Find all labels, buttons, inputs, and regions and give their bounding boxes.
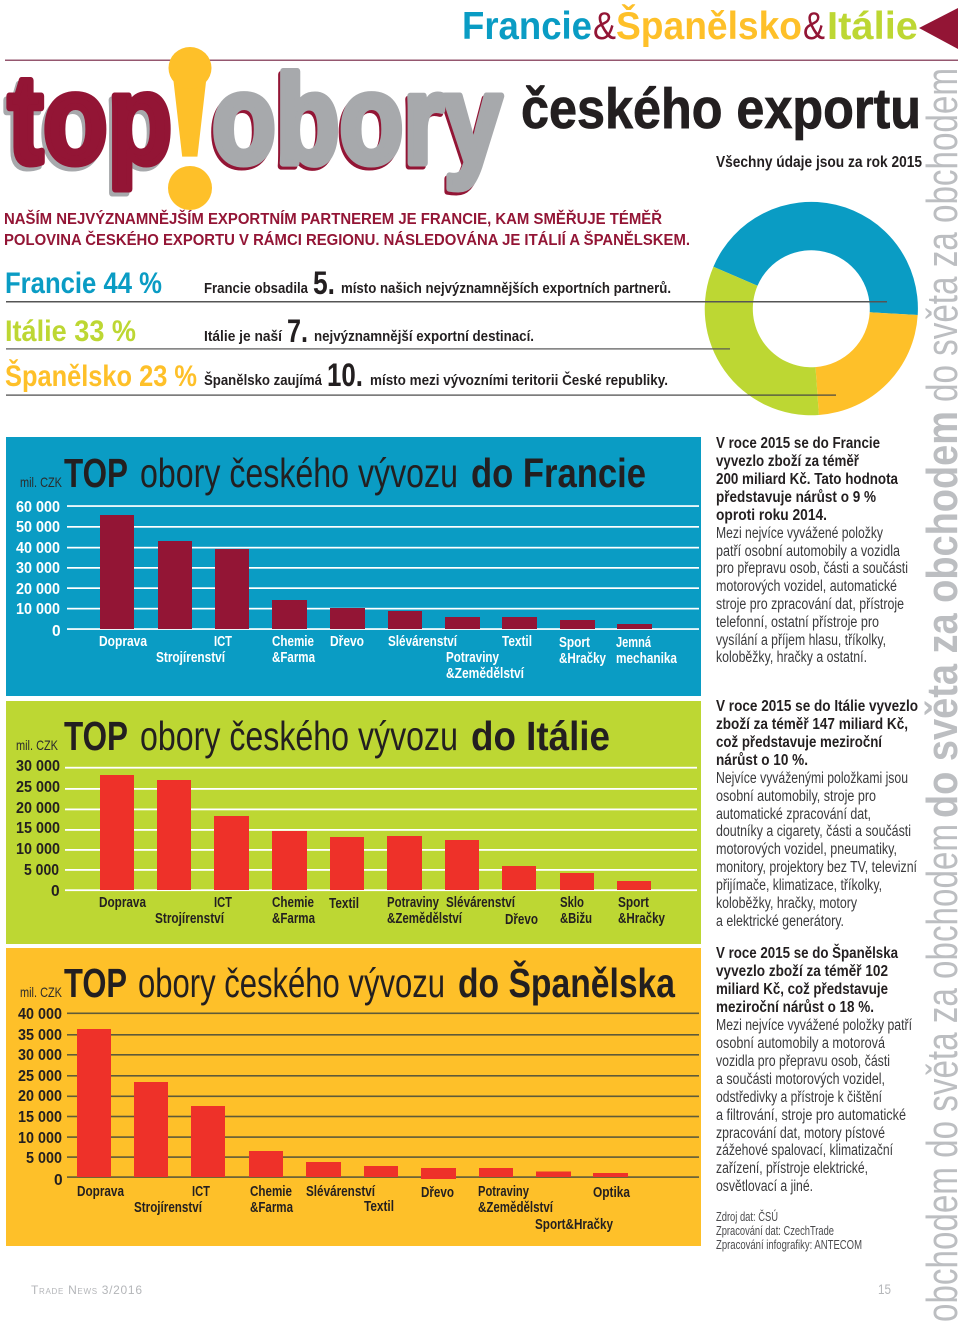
chart title: Francie: do Francie bbox=[471, 450, 646, 496]
y axis labels: 15 000 bbox=[16, 820, 60, 837]
text block: Francie: V roce 2015 se do Francie bbox=[716, 435, 880, 452]
logo word: obory: obory bbox=[210, 52, 500, 193]
sources: Zpracování dat: CzechTrade bbox=[716, 1224, 834, 1238]
text block: Itálie: motorových vozidel, pneumatiky, bbox=[716, 841, 897, 858]
category labels: Španělsko: Sport&Hračky bbox=[535, 1217, 613, 1233]
text block: Francie: stroje pro zpracování dat, přístroje bbox=[716, 596, 904, 613]
category labels: Španělsko: Dřevo bbox=[421, 1185, 454, 1201]
row: Španělsko share: Španělsko 23 % bbox=[5, 359, 197, 393]
intro text: NAŠÍM NEJVÝZNAMNĚJŠÍM EXPORTNÍM PARTNEREM JE FRANCIE, KAM SMĚŘUJE TÉMĚŘ bbox=[4, 209, 662, 228]
chart title: Francie: TOP bbox=[64, 450, 128, 496]
category labels: Francie: ICT bbox=[214, 634, 232, 650]
category labels: Francie: Slévárenství bbox=[388, 634, 458, 650]
row: Španělsko share: Španělsko zaujímá bbox=[204, 371, 323, 389]
y axis labels bbox=[16, 758, 60, 900]
row: Francie share: místo našich nejvýznamnějších exportních partnerů. bbox=[341, 281, 671, 297]
category labels: Itálie: Potraviny bbox=[387, 895, 439, 911]
category labels: Francie: &Farma bbox=[272, 650, 316, 666]
category labels: Itálie: Textil bbox=[329, 896, 359, 912]
row: Francie share: Francie obsadila bbox=[204, 281, 309, 297]
icon: header triangle bbox=[919, 8, 958, 49]
chart title: Španělsko: obory českého vývozu bbox=[138, 960, 445, 1006]
y axis labels: 40 000 bbox=[18, 1006, 62, 1023]
text block: Španělsko: miliard Kč, což představuje bbox=[716, 981, 888, 998]
note: year: Všechny údaje jsou za rok 2015 bbox=[716, 154, 922, 171]
chart title: Španělsko: do Španělska bbox=[458, 960, 676, 1006]
category labels: Itálie: &Farma bbox=[272, 911, 316, 927]
text block: Španělsko bbox=[716, 944, 913, 1195]
vertical side text bbox=[918, 68, 960, 1322]
text block: Itálie: přijímače, klimatizace, tříkolky, bbox=[716, 877, 882, 894]
chart title: Španělsko bbox=[64, 960, 676, 1006]
category labels: Francie: &Hračky bbox=[559, 651, 606, 667]
text block: Itálie: automatické zpracování dat, bbox=[716, 806, 871, 823]
chart title: Itálie: TOP bbox=[64, 713, 128, 759]
y axis labels: 30 000 bbox=[16, 758, 60, 775]
unit label: mil. CZK bbox=[16, 737, 59, 753]
y axis labels: 0 bbox=[51, 883, 60, 900]
panel: Itálie bbox=[6, 701, 701, 944]
category labels: Španělsko: Slévárenství bbox=[306, 1184, 376, 1200]
category labels: Francie: &Zemědělství bbox=[446, 666, 525, 682]
category labels: Francie: Potraviny bbox=[446, 650, 499, 666]
y axis labels: 25 000 bbox=[18, 1068, 62, 1085]
category labels: Španělsko: Optika bbox=[593, 1185, 631, 1201]
row: Francie share: Francie 44 % bbox=[5, 267, 162, 300]
logo word: top: top bbox=[8, 49, 172, 190]
y axis labels: 10 000 bbox=[16, 841, 60, 858]
chart title: Francie: obory českého vývozu bbox=[140, 450, 458, 496]
text block: Španělsko: a filtrování, stroje pro automatické bbox=[716, 1107, 906, 1124]
row: Itálie share: nejvýznamnější exportní destinací. bbox=[314, 329, 534, 345]
row: Španělsko share bbox=[5, 357, 836, 396]
text block: Itálie: což představuje meziroční bbox=[716, 734, 883, 751]
text block: Španělsko: osobní automobily a motorová bbox=[716, 1035, 885, 1052]
bar chart: Francie bbox=[100, 515, 652, 629]
sources: Zpracování infografiky: ANTECOM bbox=[716, 1238, 862, 1252]
category labels: Itálie: Chemie bbox=[272, 895, 314, 911]
text block: Španělsko: zařízení, přístroje elektrické, bbox=[716, 1160, 868, 1177]
text block: Španělsko: vyvezlo zboží za téměř 102 bbox=[716, 963, 888, 980]
row: Itálie share: 7. bbox=[287, 313, 308, 349]
y axis labels: 20 000 bbox=[18, 1088, 62, 1105]
text block: Španělsko: vozidla pro přepravu osob, části bbox=[716, 1053, 890, 1070]
text block: Francie: patří osobní automobily a vozidla bbox=[716, 543, 900, 560]
category labels: Itálie: &Bižu bbox=[560, 911, 592, 927]
header: countries: Španělsko bbox=[616, 3, 802, 48]
category labels: Itálie: Sklo bbox=[560, 895, 584, 911]
y axis labels: 5 000 bbox=[26, 1150, 62, 1167]
row: Francie share: 5. bbox=[313, 265, 335, 301]
panel: Francie bbox=[6, 437, 701, 696]
text block: Španělsko: Mezi nejvíce vyvážené položky patří bbox=[716, 1017, 913, 1034]
y axis labels: 0 bbox=[52, 623, 61, 640]
bar chart: Španělsko bbox=[77, 1029, 628, 1179]
category labels: Francie: Dřevo bbox=[330, 634, 364, 650]
category labels: Francie bbox=[99, 634, 678, 682]
header rule bbox=[5, 60, 958, 61]
y axis labels: 5 000 bbox=[24, 862, 59, 879]
text block: Španělsko: zážehové spalovací, klimatizační bbox=[716, 1142, 894, 1159]
chart title: Itálie: obory českého vývozu bbox=[140, 713, 458, 759]
text block: Itálie: Nejvíce vyváženými položkami jsou bbox=[716, 770, 908, 787]
y axis labels: 0 bbox=[54, 1172, 63, 1189]
category labels: Španělsko: ICT bbox=[192, 1184, 210, 1200]
row: Španělsko share: 10. bbox=[327, 357, 363, 393]
category labels: Španělsko: Doprava bbox=[77, 1184, 125, 1200]
text block: Španělsko: a součásti motorových vozidel, bbox=[716, 1071, 885, 1088]
category labels: Itálie: Slévárenství bbox=[446, 895, 516, 911]
category labels: Francie: Strojírenství bbox=[156, 650, 226, 666]
category labels: Francie: mechanika bbox=[616, 651, 678, 667]
text block: Španělsko: V roce 2015 se do Španělska bbox=[716, 944, 898, 962]
category labels: Španělsko: &Farma bbox=[250, 1200, 294, 1216]
category labels: Španělsko: &Zemědělství bbox=[478, 1200, 554, 1216]
footer: magazine name: Trade News 3/2016 bbox=[31, 1283, 142, 1297]
category labels: Španělsko: Chemie bbox=[250, 1184, 292, 1200]
y axis labels: 10 000 bbox=[16, 601, 60, 618]
text block: Španělsko: meziroční nárůst o 18 %. bbox=[716, 999, 874, 1016]
y axis labels: 50 000 bbox=[16, 519, 60, 536]
text block: Španělsko: zpracování dat, motory pístové bbox=[716, 1125, 885, 1142]
sources: Zdroj dat: ČSÚ bbox=[716, 1209, 778, 1224]
category labels: Itálie: Dřevo bbox=[505, 912, 538, 928]
category labels: Španělsko: Textil bbox=[364, 1199, 394, 1215]
category labels: Francie: Textil bbox=[502, 634, 532, 650]
text block: Španělsko: odstředivky a přístroje k čištění bbox=[716, 1089, 883, 1106]
category labels: Itálie: ICT bbox=[214, 895, 232, 911]
y axis labels: 60 000 bbox=[16, 499, 60, 516]
y axis labels: 30 000 bbox=[16, 560, 60, 577]
row: Itálie share bbox=[5, 313, 730, 350]
text block: Itálie: nárůst o 10 %. bbox=[716, 752, 808, 769]
category labels: Itálie: &Hračky bbox=[618, 911, 665, 927]
text block: Itálie: doutníky a cigarety, části a součásti bbox=[716, 823, 911, 840]
text block: Itálie: koloběžky, hračky, motory bbox=[716, 895, 857, 912]
text block: Itálie: a elektrické generátory. bbox=[716, 913, 844, 930]
y axis labels: 15 000 bbox=[18, 1109, 62, 1126]
bar chart: Itálie bbox=[100, 775, 651, 890]
text block: Itálie bbox=[716, 698, 918, 930]
y axis labels bbox=[18, 1006, 63, 1189]
text block: Itálie: V roce 2015 se do Itálie vyvezlo bbox=[716, 698, 918, 715]
y axis labels: 20 000 bbox=[16, 800, 60, 817]
category labels: Francie: Doprava bbox=[99, 634, 148, 650]
category labels: Španělsko bbox=[77, 1184, 631, 1233]
chart title: Itálie: do Itálie bbox=[471, 713, 610, 759]
text block: Francie: oproti roku 2014. bbox=[716, 507, 827, 524]
header: countries: Itálie bbox=[827, 5, 918, 48]
logo word: top: top bbox=[5, 53, 169, 194]
page number: 15 bbox=[878, 1282, 891, 1297]
row: Španělsko share: místo mezi vývozními teritorii České republiky. bbox=[370, 371, 668, 389]
y axis labels: 20 000 bbox=[16, 581, 60, 598]
category labels: Francie: Jemná bbox=[616, 635, 652, 651]
y axis labels: 10 000 bbox=[18, 1130, 62, 1147]
chart title: Španělsko: TOP bbox=[64, 960, 127, 1006]
panel: Španělsko bbox=[6, 948, 701, 1246]
text block: Francie: představuje nárůst o 9 % bbox=[716, 489, 876, 506]
text block: Itálie: osobní automobily, stroje pro bbox=[716, 788, 876, 805]
category labels: Itálie: Strojírenství bbox=[155, 911, 225, 927]
text block: Itálie: zboží za téměř 147 miliard Kč, bbox=[716, 716, 908, 733]
text block: Španělsko: osvětlovací a jiné. bbox=[716, 1178, 813, 1195]
text block: Francie: motorových vozidel, automatické bbox=[716, 578, 897, 595]
header: countries: & bbox=[593, 5, 616, 48]
category labels: Francie: Chemie bbox=[272, 634, 314, 650]
header: countries: Francie bbox=[462, 5, 592, 48]
intro text bbox=[4, 209, 690, 249]
category labels: Francie: Sport bbox=[559, 635, 590, 651]
y axis labels: 35 000 bbox=[18, 1027, 62, 1044]
logo exclamation mark bbox=[168, 47, 212, 210]
category labels: Španělsko: Strojírenství bbox=[134, 1200, 203, 1216]
y axis labels: 30 000 bbox=[18, 1047, 62, 1064]
header: countries bbox=[462, 3, 918, 48]
unit label: mil. CZK bbox=[20, 474, 63, 490]
category labels: Itálie: &Zemědělství bbox=[387, 911, 463, 927]
category labels: Itálie bbox=[99, 895, 665, 928]
text block: Francie: vysílání a příjem hlasu, tříkolky, bbox=[716, 632, 886, 649]
text block: Francie: telefonní, ostatní přístroje pro bbox=[716, 614, 879, 631]
text block: Francie bbox=[716, 435, 908, 666]
y axis labels bbox=[16, 499, 61, 640]
logo exclamation mark: ! bbox=[145, 0, 235, 257]
sources bbox=[716, 1209, 862, 1252]
intro text: POLOVINA ČESKÉHO EXPORTU V RÁMCI REGIONU. NÁSLEDOVÁNA JE ITÁLIÍ A ŠPANĚLSKEM. bbox=[4, 230, 690, 249]
chart title: Francie bbox=[64, 450, 646, 496]
y axis labels: 25 000 bbox=[16, 779, 60, 796]
text block: Francie: vyvezlo zboží za téměř bbox=[716, 453, 859, 470]
header: countries: & bbox=[803, 5, 825, 48]
logo word: obory: obory bbox=[212, 49, 502, 190]
unit label: mil. CZK bbox=[20, 984, 63, 1000]
text block: Francie: Mezi nejvíce vyvážené položky bbox=[716, 525, 883, 542]
y axis labels: 40 000 bbox=[16, 540, 60, 557]
category labels: Itálie: Doprava bbox=[99, 895, 147, 911]
category labels: Itálie: Sport bbox=[618, 895, 649, 911]
row: Itálie share: Itálie je naší bbox=[204, 329, 283, 345]
donut chart bbox=[705, 202, 918, 415]
text block: Francie: pro přepravu osob, části a součásti bbox=[716, 560, 908, 577]
row: Francie share bbox=[5, 265, 887, 302]
text block: Francie: koloběžky, hračky a ostatní. bbox=[716, 649, 867, 666]
category labels: Španělsko: Potraviny bbox=[478, 1184, 529, 1200]
row: Itálie share: Itálie 33 % bbox=[5, 315, 136, 348]
text block: Francie: 200 miliard Kč. Tato hodnota bbox=[716, 471, 898, 488]
